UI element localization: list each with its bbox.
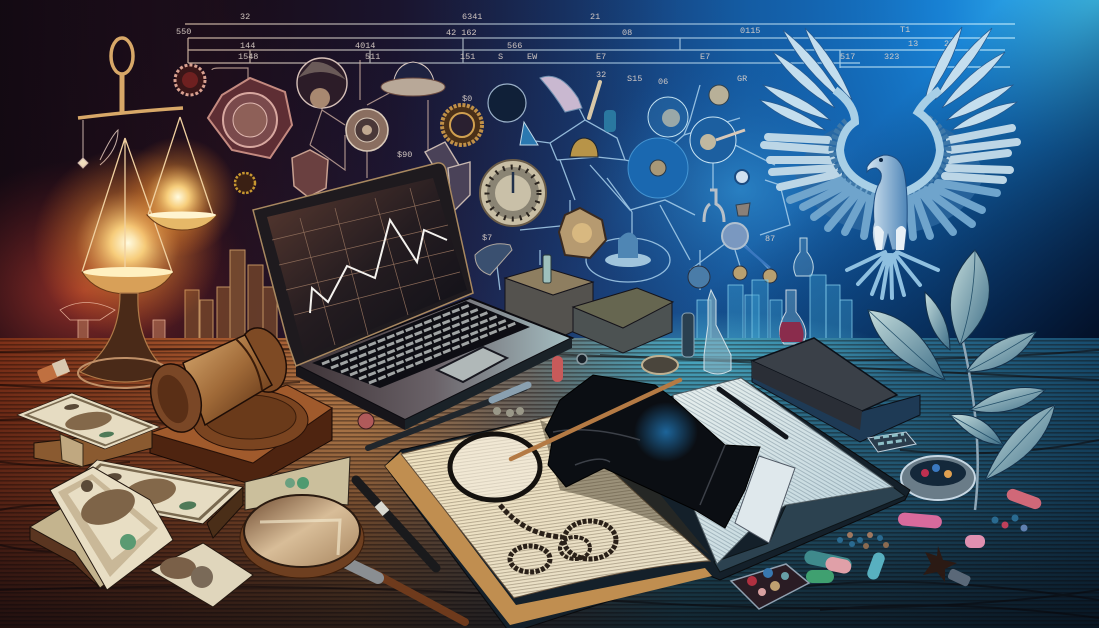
chart line: [310, 220, 447, 313]
right wing: [905, 27, 1017, 237]
emblem: gem flower: [559, 208, 606, 258]
timeline with numbers: EW: [527, 52, 538, 62]
magnifier with chain: [450, 434, 616, 572]
timeline with numbers: GR: [737, 74, 747, 84]
glove: [545, 375, 760, 528]
pen on desk left: [356, 480, 436, 568]
timeline with numbers: 13: [908, 39, 918, 49]
emblem: gear: [175, 65, 205, 95]
emblem: triangle: [520, 122, 538, 145]
timeline with numbers: [176, 12, 1015, 244]
emblem: disc: [381, 62, 445, 96]
trackpad: [437, 347, 507, 382]
bill behind magnifier: [245, 457, 350, 510]
red shell: [358, 413, 374, 429]
timeline with numbers: 32: [596, 70, 606, 80]
laptop base: [296, 298, 572, 420]
timeline with numbers: E7: [596, 52, 606, 62]
emblem: blue stopper: [604, 110, 616, 132]
timeline with numbers: 06: [658, 77, 668, 87]
box back: [505, 267, 593, 340]
wiring between left emblems: [212, 60, 428, 178]
book cover: [385, 378, 910, 628]
timeline with numbers: 27: [944, 39, 954, 49]
test tube: [682, 313, 694, 357]
gavel block: [150, 385, 332, 485]
emblem: comb: [736, 203, 750, 216]
money stacks: [17, 393, 350, 607]
dark ring: [577, 354, 587, 364]
gloved hand with pen: [511, 375, 795, 543]
timeline with numbers: 4014: [355, 41, 375, 51]
emblem: coins: [688, 266, 777, 288]
timeline with numbers: 32: [240, 12, 250, 22]
eraser: [36, 359, 70, 384]
timeline with numbers: T1: [900, 25, 910, 35]
bill stack back: [17, 393, 160, 467]
timeline with numbers: 42 162: [446, 28, 477, 38]
tail: [847, 252, 938, 298]
emblem: money sketch: [425, 142, 470, 213]
keyboard: [322, 305, 516, 383]
timeline with numbers: 566: [507, 41, 522, 51]
small pill tray: [868, 432, 916, 452]
small sockets behind the desk: [60, 302, 165, 362]
sketch: small star and feather: [78, 120, 118, 168]
emblem: blue swirl: [628, 138, 688, 198]
network diagram: [488, 76, 813, 290]
emblem: eye globe: [297, 58, 347, 108]
timeline with numbers: 08: [622, 28, 632, 38]
scales stem and base: [78, 293, 170, 388]
emblem: wax seal: [208, 78, 292, 158]
pills box: [731, 564, 809, 609]
city skyline blue: [697, 275, 852, 340]
timeline with numbers: 1548: [238, 52, 258, 62]
shirt cuff: [735, 456, 795, 543]
timeline with numbers: S: [498, 52, 503, 62]
laptop: [253, 163, 572, 430]
boxes: [505, 255, 673, 353]
small desk objects: [552, 354, 678, 382]
timeline with numbers: $7: [482, 233, 492, 243]
emblem: magnifier: [722, 223, 770, 268]
timeline with numbers: 550: [176, 27, 191, 37]
laptop screen: [253, 163, 473, 366]
bill middle: [57, 460, 243, 538]
left page: [401, 416, 710, 598]
flasks: [682, 290, 806, 374]
background wall: [0, 0, 1099, 420]
emblem: pin circle: [690, 117, 745, 163]
emblem: pencil: [589, 82, 600, 118]
timeline with numbers: 323: [884, 52, 899, 62]
timeline with numbers: 511: [365, 52, 380, 62]
ring: [642, 356, 678, 374]
right page: [673, 378, 893, 564]
pill dish: [901, 456, 975, 500]
box front: [573, 288, 673, 353]
emblem: gold dome: [570, 138, 598, 157]
metal clips: [493, 407, 524, 417]
timeline with numbers: 21: [590, 12, 600, 22]
emblem: fan sketch: [475, 244, 512, 275]
timeline with numbers: 144: [240, 41, 255, 51]
eagle: [760, 27, 1017, 298]
emblem: dial: [346, 109, 388, 151]
bill front: [50, 467, 173, 590]
pen on desk top: [368, 385, 528, 448]
pen on page: [719, 389, 786, 437]
city skyline warm: [185, 250, 277, 340]
timeline with numbers: S15: [627, 74, 642, 84]
pen in hand: [511, 380, 680, 459]
desk: [0, 312, 1099, 628]
timeline with numbers: $90: [397, 150, 412, 160]
bottle: [704, 290, 731, 374]
gavel set: [142, 322, 332, 485]
bill stack lower left: [30, 500, 130, 588]
left wing: [760, 28, 878, 236]
emblem: coin: [709, 85, 729, 105]
timeline with numbers: 6341: [462, 12, 482, 22]
scattered pills: [803, 487, 1043, 587]
tube on box: [543, 255, 551, 283]
body and head: [867, 155, 907, 250]
timeline with numbers: $0: [462, 94, 472, 104]
gavel head: [142, 322, 294, 439]
red flask: [779, 290, 806, 344]
magnifying glass: [240, 495, 465, 622]
hand shadow: [540, 420, 710, 555]
emblem: dark seal: [488, 84, 526, 122]
emblem: shield: [292, 150, 328, 197]
right page stack: [714, 487, 905, 572]
timeline with numbers: 87: [765, 234, 775, 244]
timeline with numbers: 517: [840, 52, 855, 62]
open book: [385, 378, 910, 628]
scales lamp: [33, 38, 238, 338]
emblem: small ring: [735, 170, 749, 184]
emblem: clamp: [704, 190, 724, 222]
emblem: flask outline: [794, 238, 813, 276]
emblem: feather: [540, 76, 582, 112]
upright capsule: [552, 356, 563, 382]
timeline with numbers: 0115: [740, 26, 760, 36]
leaves branch: [868, 250, 1055, 510]
emblem: stacked stones on plate: [605, 232, 651, 267]
timeline with numbers: 151: [460, 52, 475, 62]
stacked black books: [752, 338, 920, 442]
emblem: gold gear: [442, 105, 482, 145]
bill bottom: [150, 543, 253, 607]
emblem: clock: [480, 160, 546, 226]
emblem: upper circle: [648, 97, 688, 137]
timeline with numbers: E7: [700, 52, 710, 62]
emblem: small gold medallion: [235, 173, 255, 193]
